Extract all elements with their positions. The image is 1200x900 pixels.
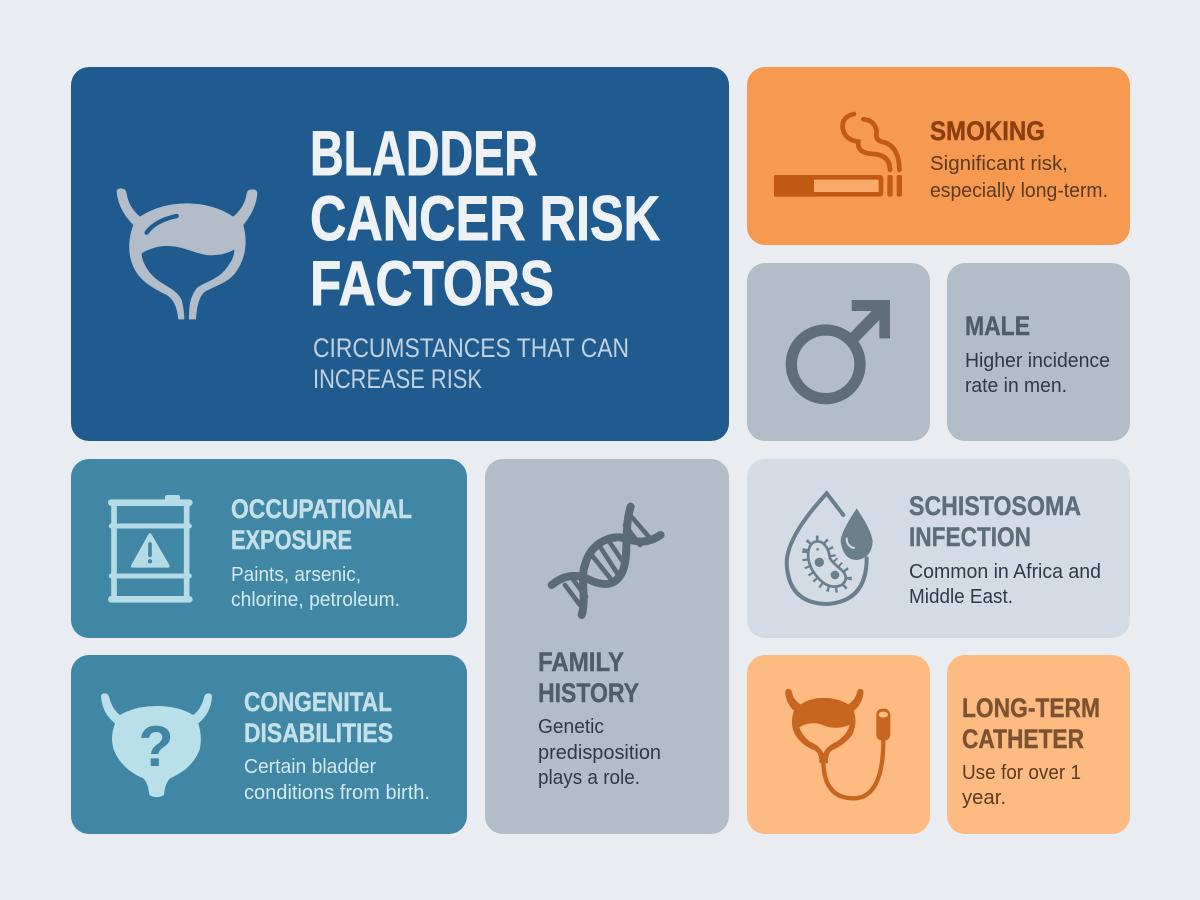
text: congenital description [244, 756, 430, 804]
text: smoking description: Significant risk, [930, 153, 1068, 175]
heading: title [310, 119, 660, 319]
text: catheter description: Use for over 1 [962, 762, 1081, 784]
panel: long-term catheter [947, 655, 1130, 834]
text: family description [538, 716, 661, 789]
text: catheter description: year. [962, 787, 1006, 809]
heading: title: FACTORS [310, 249, 554, 319]
heading: congenital disabilities: CONGENITAL [244, 687, 392, 717]
panel: occupational exposure [71, 459, 467, 638]
panel: male [947, 263, 1130, 441]
text: congenital description: Certain bladder [244, 756, 376, 778]
heading: title: CANCER RISK [310, 184, 660, 254]
icon: hazard barrel [111, 495, 189, 599]
text: male description: Higher incidence [965, 350, 1110, 372]
panel: catheter icon [747, 655, 930, 834]
text: schistosoma description: Common in Africa and [909, 561, 1101, 583]
icon: male symbol [791, 300, 890, 399]
text: schistosoma description: Middle East. [909, 586, 1013, 608]
text: schistosoma description [909, 561, 1101, 608]
panel: family history [485, 459, 729, 834]
heading: family history [538, 647, 639, 708]
heading: congenital disabilities [244, 687, 393, 748]
text: family description: predisposition [538, 742, 661, 764]
subtitle: CIRCUMSTANCES THAT CAN [313, 333, 629, 363]
text: occupational description [231, 564, 400, 611]
text: congenital description: conditions from birth. [244, 782, 430, 804]
heading: title: BLADDER [310, 119, 538, 189]
heading: schistosoma infection [909, 491, 1081, 552]
icon: bladder [117, 188, 257, 319]
subtitle: INCREASE RISK [313, 364, 482, 394]
icon: cigarette [774, 114, 902, 197]
text: smoking description [930, 153, 1108, 202]
subtitle [313, 333, 629, 394]
text: family description: Genetic [538, 716, 604, 738]
panel: smoking [747, 67, 1130, 245]
heading: smoking: SMOKING [930, 116, 1045, 146]
text: male description: rate in men. [965, 375, 1067, 397]
text: male description [965, 350, 1110, 397]
panel: male icon [747, 263, 930, 441]
panel: congenital disabilities [71, 655, 467, 834]
icon: bladder with catheter [786, 689, 890, 798]
text: occupational description: Paints, arsenic, [231, 564, 361, 586]
heading: long-term catheter [962, 693, 1100, 754]
text: occupational description: chlorine, petroleum. [231, 589, 400, 611]
text: catheter description [962, 762, 1081, 809]
heading: schistosoma infection: INFECTION [909, 522, 1031, 552]
heading: male: MALE [965, 311, 1030, 341]
heading: congenital disabilities: DISABILITIES [244, 718, 393, 748]
text: family description: plays a role. [538, 767, 640, 789]
heading: family history: FAMILY [538, 647, 624, 677]
heading: long-term catheter: CATHETER [962, 724, 1084, 754]
heading: family history: HISTORY [538, 678, 639, 708]
heading: schistosoma infection: SCHISTOSOMA [909, 491, 1081, 521]
heading: occupational exposure: OCCUPATIONAL [231, 494, 412, 524]
icon: bladder with question mark [101, 693, 212, 797]
icon: bladder with question mark: ? [138, 715, 174, 779]
heading: occupational exposure: EXPOSURE [231, 525, 352, 555]
icon: water drop with parasite [787, 493, 873, 604]
panel: schistosoma infection [747, 459, 1130, 638]
heading: long-term catheter: LONG-TERM [962, 693, 1100, 723]
text: smoking description: especially long-term. [930, 180, 1108, 202]
heading: occupational exposure [231, 494, 412, 555]
panel: title [71, 67, 729, 441]
icon: DNA helix [552, 507, 661, 615]
